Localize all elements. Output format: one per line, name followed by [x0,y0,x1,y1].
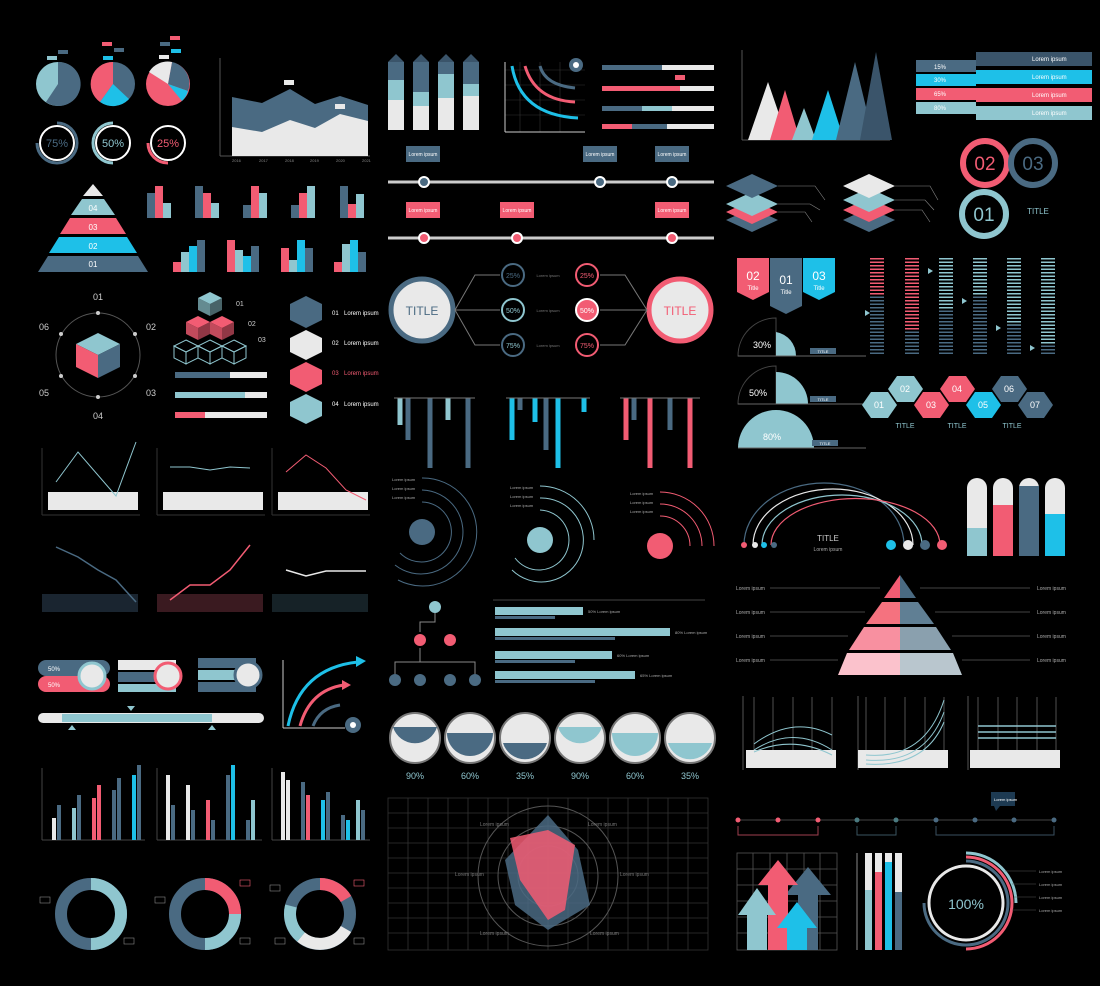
ribbon banners: 02 [746,269,760,283]
concentric arcs: Lorem ipsum [630,500,654,505]
radar chart: Lorem ipsum [455,872,484,878]
semicircle gauges: 80% [763,432,781,442]
stacked blocks: Lorem ipsum [344,402,379,408]
stacked percentage table: 80% [934,106,947,112]
split pyramid: Lorem ipsum [736,634,765,640]
concentric arcs: Lorem ipsum [630,491,654,496]
radar chart: Lorem ipsum [588,822,617,828]
hexagon chain: 02 [900,384,910,394]
title hub diagram: Lorem ipsum [536,308,560,313]
100% circle: Lorem ipsum [1039,869,1063,874]
split pyramid: Lorem ipsum [1037,658,1066,664]
horizontal bars: 80% Lorem ipsum [675,630,708,635]
hexagon chain [862,376,1053,430]
cube pyramid [174,292,266,364]
stacked blocks: 03 [332,371,339,377]
title hub diagram: 25% [580,273,594,280]
curved arrow chart [283,656,366,733]
vertical dashed bars [865,258,1048,355]
100% circle [924,853,1063,949]
title hub diagram: TITLE [664,304,696,318]
gauge circles: 90% [571,771,589,781]
concentric arcs: Lorem ipsum [510,503,534,508]
concentric arcs: Lorem ipsum [630,509,654,514]
stacked blocks: Lorem ipsum [344,311,379,317]
line charts row 1 [42,442,370,515]
area chart: 2018 [285,158,295,163]
hexagon chain: 03 [926,400,936,410]
cube pyramid: 03 [258,337,266,344]
concentric arcs: Lorem ipsum [510,494,534,499]
percentage rings: 75% [46,138,68,150]
title hub diagram: 75% [580,343,594,350]
timelines: Lorem ipsum [586,152,614,158]
progress bars [602,65,714,129]
stacked percentage table: Lorem ipsum [1032,75,1067,81]
hexagon chain: TITLE [1002,423,1022,430]
area chart [220,58,372,163]
hexagon chain: 07 [1030,400,1040,410]
numbered circles 01 02 03: 01 [973,205,995,226]
curved arrows chart [505,58,585,132]
area chart: 2019 [310,158,320,163]
concentric arcs [392,477,714,586]
area chart: 2021 [362,158,372,163]
timelines: Lorem ipsum [503,208,531,214]
100% circle: Lorem ipsum [1039,908,1063,913]
gauge circles: 60% [461,771,479,781]
stacked percentage table: 30% [934,78,947,84]
hexagon cube diagram [39,292,156,421]
hexagon cube diagram: 04 [93,411,103,421]
stacked percentage table: 65% [934,92,947,98]
percentage rings: 25% [157,138,179,150]
arrows chart [737,853,837,950]
title hub diagram: TITLE [406,304,438,318]
timelines: Lorem ipsum [409,208,437,214]
gauge circles [390,713,715,781]
hexagon cube diagram: 02 [146,322,156,332]
stacked blocks: 01 [332,311,339,317]
stacked blocks: 04 [332,402,339,408]
hexagon chain: 05 [978,400,988,410]
percentage rings: 50% [102,138,124,150]
tube gauges [967,478,1065,556]
concentric arcs: Lorem ipsum [392,495,416,500]
numbered circles 01 02 03: TITLE [1027,207,1049,216]
ribbon banners: 01 [779,273,793,287]
hexagon cube diagram: 03 [146,388,156,398]
hexagon chain: 04 [952,384,962,394]
milestone timeline [736,792,1056,835]
semicircle gauges: 30% [753,340,771,350]
numbered circles 01 02 03: 02 [974,154,996,175]
arc connectors with title: TITLE [817,534,839,543]
numbered circles 01 02 03: 03 [1022,154,1044,175]
title hub diagram: 75% [506,343,520,350]
hexagon chain: TITLE [895,423,915,430]
pyramid 01-05: 04 [89,204,98,213]
numbered circles 01 02 03 [962,141,1055,236]
milestone timeline: Lorem ipsum [994,797,1018,802]
concentric arcs: Lorem ipsum [392,486,416,491]
gauge circles: 35% [681,771,699,781]
semicircle gauges: TITLE [818,349,829,354]
info cards: 50% [48,667,61,673]
pie charts [36,36,190,106]
area chart: 2016 [232,158,242,163]
gauge circles: 60% [626,771,644,781]
ribbon banners: Title [813,286,825,292]
curve line charts [743,696,1060,770]
horizontal bars: 60% Lorem ipsum [617,653,650,658]
title hub diagram: 50% [506,308,520,315]
split pyramid: Lorem ipsum [736,610,765,616]
semicircle gauges: TITLE [820,441,831,446]
vertical fill bars [857,853,902,950]
donut charts [40,880,364,944]
hanging bar charts [394,398,700,468]
percentage rings [37,123,185,163]
ribbon banners: Title [780,290,792,296]
stacked percentage table [916,52,1092,120]
title hub diagram: 50% [580,308,594,315]
split pyramid: Lorem ipsum [1037,634,1066,640]
ribbon banners: 03 [812,269,826,283]
split pyramid [736,575,1066,675]
radar chart: Lorem ipsum [620,872,649,878]
title hub diagram: 25% [506,273,520,280]
hexagon cube diagram: 05 [39,388,49,398]
line charts row 2 [42,545,368,612]
area chart: 2017 [259,158,269,163]
ribbon banners [737,258,835,314]
concentric arcs: Lorem ipsum [510,485,534,490]
stacked percentage table: Lorem ipsum [1032,57,1067,63]
timelines: Lorem ipsum [658,208,686,214]
100% circle: Lorem ipsum [1039,882,1063,887]
3D column bars [388,54,479,130]
radar chart: Lorem ipsum [590,931,619,937]
100% circle: Lorem ipsum [1039,895,1063,900]
progress strips left [175,372,267,418]
pyramid 01-05: 02 [89,242,98,251]
bar charts bottom left [42,765,370,840]
radar chart: Lorem ipsum [480,931,509,937]
small bar charts [173,240,366,272]
arc connectors with title [741,483,947,553]
concentric arcs: Lorem ipsum [392,477,416,482]
layer stacks [726,174,938,232]
semicircle gauges: TITLE [818,397,829,402]
cube pyramid: 02 [248,321,256,328]
gauge circles: 90% [406,771,424,781]
radar chart: Lorem ipsum [480,822,509,828]
horizontal bars [493,600,708,683]
gauge circles: 35% [516,771,534,781]
triangle peaks chart [742,50,892,140]
horizontal bars: 50% Lorem ipsum [588,609,621,614]
title hub diagram: Lorem ipsum [536,343,560,348]
area chart: 2020 [336,158,346,163]
info cards: 50% [48,683,61,689]
hexagon cube diagram: 06 [39,322,49,332]
hexagon cube diagram: 01 [93,292,103,302]
stacked blocks: Lorem ipsum [344,371,379,377]
stacked blocks [290,296,379,424]
split pyramid: Lorem ipsum [736,586,765,592]
pyramid 01-05: 01 [89,260,98,269]
pyramid 01-05 [38,184,148,272]
timelines: Lorem ipsum [409,152,437,158]
split pyramid: Lorem ipsum [736,658,765,664]
semicircle gauges [738,318,866,448]
semicircle gauges: 50% [749,388,767,398]
horizontal bars: 65% Lorem ipsum [640,673,673,678]
stacked percentage table: Lorem ipsum [1032,111,1067,117]
hexagon chain: 06 [1004,384,1014,394]
stacked blocks: 02 [332,341,339,347]
split pyramid: Lorem ipsum [1037,586,1066,592]
timelines: Lorem ipsum [658,152,686,158]
hexagon chain: 01 [874,400,884,410]
pyramid 01-05: 03 [89,223,98,232]
cube pyramid: 01 [236,301,244,308]
org tree [389,601,481,686]
stacked percentage table: 15% [934,65,947,71]
info cards [38,658,264,730]
grouped bar charts [147,186,364,218]
radar chart [388,798,708,950]
title hub diagram: Lorem ipsum [536,273,560,278]
ribbon banners: Title [747,286,759,292]
title hub diagram [391,264,711,356]
hexagon chain: TITLE [947,423,967,430]
100% circle: 100% [948,896,984,912]
split pyramid: Lorem ipsum [1037,610,1066,616]
stacked blocks: Lorem ipsum [344,341,379,347]
timelines [388,146,714,243]
arc connectors with title: Lorem ipsum [814,547,842,553]
stacked percentage table: Lorem ipsum [1032,93,1067,99]
